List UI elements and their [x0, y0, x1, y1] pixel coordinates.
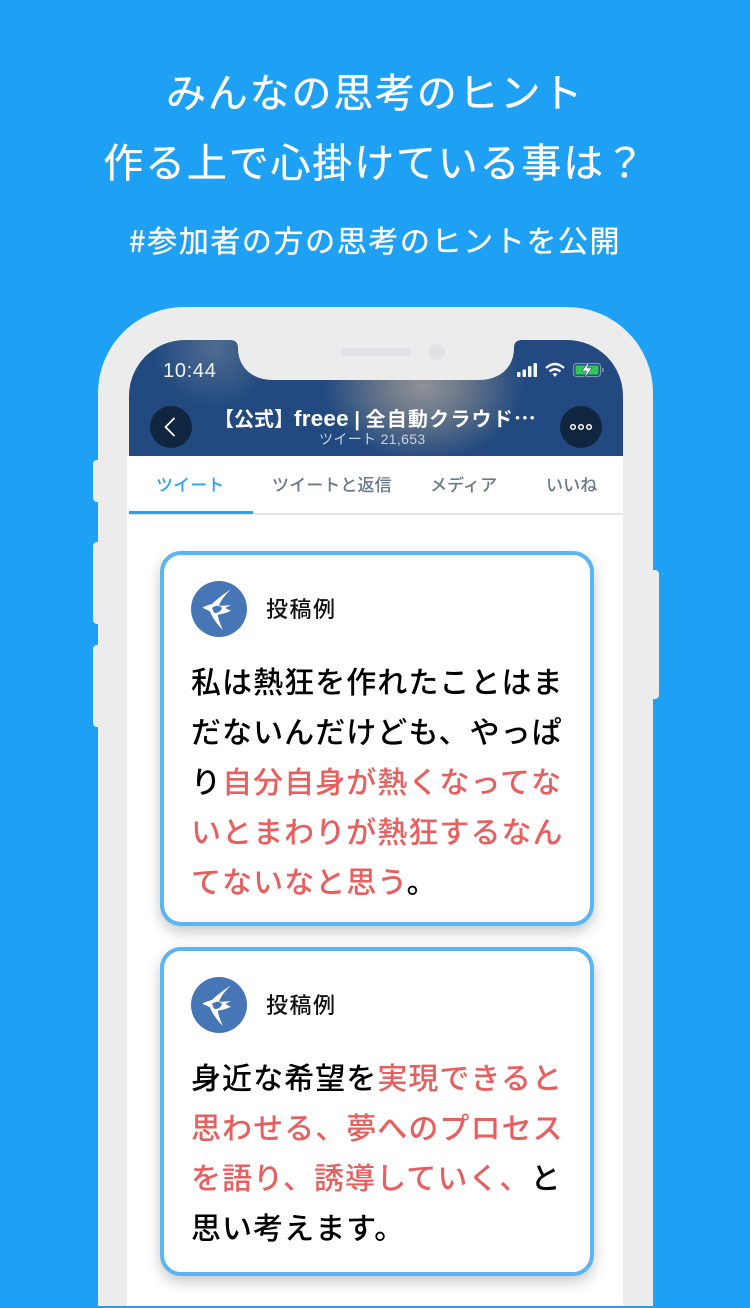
post text [191, 1054, 564, 1248]
post text: てないなと思う。 [191, 858, 438, 902]
speaker [341, 348, 411, 356]
tab bar rule [129, 513, 623, 515]
phone side button: left middle [93, 542, 103, 624]
post text: いとまわりが熱狂するなん [191, 808, 564, 852]
post text: 思い考えます。 [191, 1204, 405, 1248]
icon: swallow avatar [191, 977, 247, 1033]
camera [429, 344, 445, 360]
phone side button: right [648, 570, 659, 699]
panel: post example 2 [160, 947, 594, 1276]
screen content background [127, 456, 623, 1306]
back button [150, 406, 192, 448]
status time: 10:44 [163, 360, 217, 382]
post label: 投稿例 [266, 592, 337, 624]
account name: 【公式】freee | 全自動クラウド… [214, 401, 537, 433]
notch [230, 340, 522, 380]
post text: 私は熱狂を作れたことはま [191, 658, 564, 702]
icon: swallow avatar [191, 581, 247, 637]
tweet count: ツイート 21,653 [319, 431, 426, 447]
title line 2: 作る上で心掛けている事は？ [103, 131, 647, 189]
phone side button: left top [93, 460, 103, 502]
tab: likes: いいね [546, 471, 597, 496]
phone side button: left bottom [93, 645, 103, 727]
phone screen header [129, 340, 623, 456]
post text: を語り、誘導していく、と [191, 1154, 562, 1198]
status icons: signal, wifi, battery [517, 362, 604, 378]
post text: り自分自身が熱くなってな [191, 758, 562, 802]
phone body [98, 307, 653, 1306]
tab: tweets: ツイート [156, 471, 224, 496]
post text: 思わせる、夢へのプロセス [191, 1104, 564, 1148]
post text: 身近な希望を実現できると [191, 1054, 563, 1098]
subtitle: #参加者の方の思考のヒントを公開 [129, 217, 621, 261]
post label: 投稿例 [266, 988, 337, 1020]
post text [191, 658, 564, 902]
more button [560, 406, 602, 448]
tab active underline [129, 511, 253, 514]
tab: tweets and replies: ツイートと返信 [272, 471, 392, 496]
title line 1: みんなの思考のヒント [166, 61, 584, 119]
post text: だないんだけども、やっぱ [191, 708, 563, 752]
tab: media: メディア [430, 471, 497, 496]
panel: post example 1 [160, 551, 594, 926]
